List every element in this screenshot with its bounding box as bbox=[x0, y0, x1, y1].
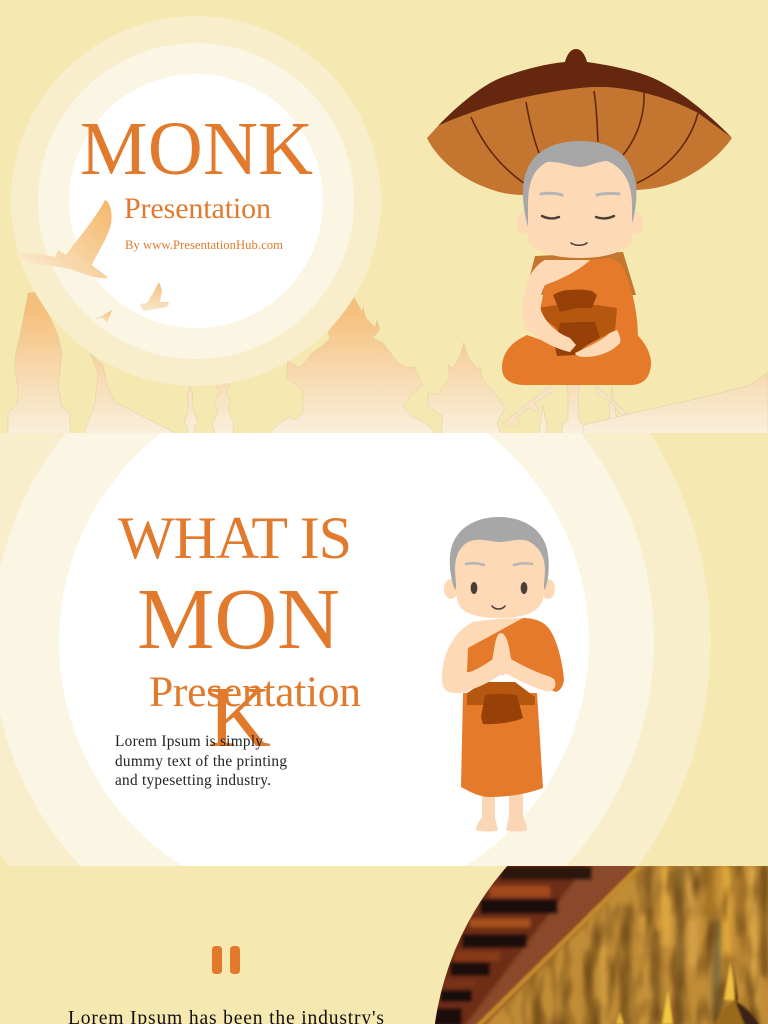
upper robe bbox=[467, 618, 564, 692]
title: MONK: MONK bbox=[80, 107, 313, 191]
arms and hands bbox=[452, 633, 548, 684]
icon: large bird bbox=[13, 200, 112, 278]
crossed legs bbox=[502, 333, 651, 385]
face bbox=[455, 540, 545, 618]
icon: quote mark bars bbox=[212, 946, 240, 974]
hair bbox=[523, 141, 636, 227]
ears bbox=[444, 579, 555, 599]
sash bbox=[467, 682, 535, 705]
smile bbox=[571, 243, 587, 245]
legs and feet bbox=[476, 790, 527, 832]
arms and hands bbox=[522, 260, 620, 357]
eyebrows bbox=[466, 563, 532, 565]
body text bbox=[115, 733, 287, 789]
pocket bbox=[481, 694, 523, 724]
panel: what is monk slide bbox=[0, 433, 710, 866]
face bbox=[528, 161, 632, 258]
robe torso bbox=[540, 258, 638, 350]
icon: meditating monk with hat bbox=[427, 49, 732, 385]
subheading: presentation: Presentation bbox=[149, 668, 361, 716]
skin shoulders and left arm bbox=[442, 618, 523, 693]
ears bbox=[516, 212, 644, 234]
heading: k wrapped: K bbox=[208, 668, 271, 765]
eyes bbox=[471, 582, 527, 594]
heading: mon: MON bbox=[137, 570, 340, 667]
title circle rings bbox=[11, 16, 381, 386]
byline: By www.PresentationHub.com bbox=[125, 238, 283, 252]
hair bbox=[450, 517, 549, 590]
back robe bbox=[525, 252, 636, 295]
panel: quote slide bbox=[0, 860, 768, 1024]
icon: greeting monk bbox=[442, 517, 564, 832]
photo: golden temple wall bbox=[420, 860, 768, 1024]
background bbox=[0, 866, 768, 1024]
smile bbox=[492, 606, 505, 609]
body text: Lorem Ipsum is simply bbox=[115, 733, 263, 750]
body text: and typesetting industry. bbox=[115, 772, 271, 789]
robe skirt bbox=[461, 693, 543, 797]
rings bbox=[0, 433, 710, 866]
eyebrows bbox=[541, 193, 619, 195]
hat bbox=[427, 49, 732, 195]
body text: dummy text of the printing bbox=[115, 753, 287, 770]
icon: small bird bbox=[140, 282, 169, 311]
temple skyline silhouette bbox=[8, 292, 768, 437]
subtitle: Presentation: Presentation bbox=[124, 192, 271, 225]
panel: cover slide bbox=[8, 16, 768, 437]
bunting lines bbox=[502, 386, 628, 424]
closed eyes bbox=[542, 216, 614, 218]
bowl bbox=[540, 290, 617, 356]
heading: what is: WHAT IS bbox=[118, 505, 352, 571]
icon: tiny bird bbox=[94, 310, 112, 323]
